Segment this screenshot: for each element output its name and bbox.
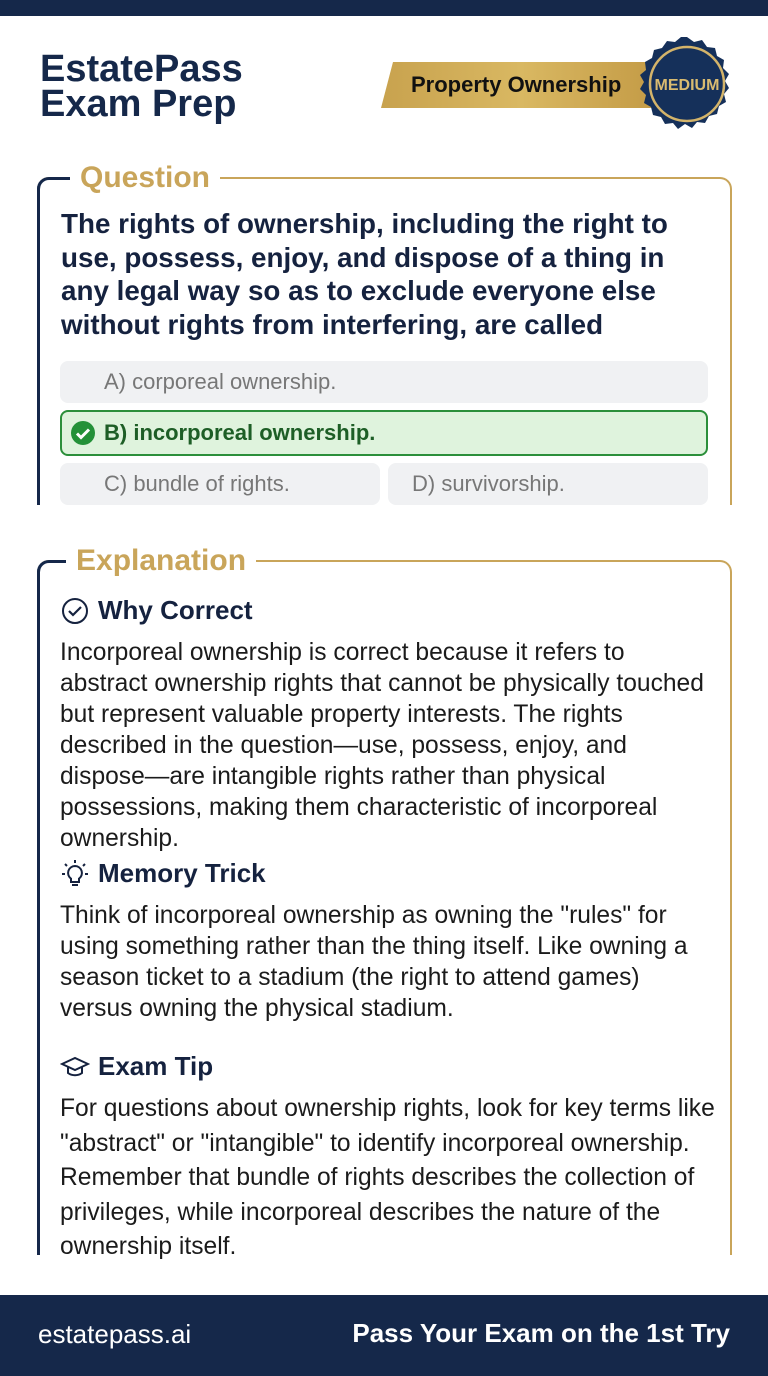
why correct text: [60, 639, 704, 852]
option D: [388, 463, 708, 505]
panel: question: [37, 177, 732, 505]
category ribbon: [381, 62, 661, 108]
logo title: Exam Prep: [40, 83, 236, 125]
option A: A) corporeal ownership.: [104, 369, 336, 394]
memory trick heading: Memory Trick: [98, 858, 266, 888]
why correct text: ownership.: [60, 825, 179, 852]
why correct text: abstract ownership rights that cannot be physically touched: [60, 670, 704, 697]
exam tip text: "abstract" or "intangible" to identify incorporeal ownership.: [60, 1130, 690, 1156]
why correct text: but represent valuable property interests. The rights: [60, 701, 623, 728]
footer tagline: Pass Your Exam on the 1st Try: [352, 1318, 730, 1348]
question text: The rights of ownership, including the right to: [61, 208, 668, 239]
why correct text: dispose—are intangible rights rather than physical: [60, 763, 605, 790]
question text: any legal way so as to exclude everyone else: [61, 275, 656, 306]
exam tip text: For questions about ownership rights, look for key terms like: [60, 1095, 715, 1122]
why correct text: possessions, making them characteristic of incorporeal: [60, 794, 657, 821]
difficulty badge: [640, 37, 729, 129]
exam tip heading: Exam Tip: [98, 1051, 213, 1081]
footer: [0, 1295, 768, 1376]
explanation heading: Explanation: [76, 544, 246, 577]
exam tip text: ownership itself.: [60, 1233, 236, 1260]
icon: check: [71, 421, 95, 445]
why correct text: Incorporeal ownership is correct because it refers to: [60, 639, 625, 666]
memory trick text: [60, 902, 688, 1022]
memory trick text: using something rather than the thing itself. Like owning a: [60, 933, 688, 960]
why correct text: described in the question—use, possess, enjoy, and: [60, 732, 627, 759]
exam tip text: privileges, while incorporeal describes the nature of the: [60, 1198, 660, 1226]
memory trick text: season ticket to a stadium (the right to attend games): [60, 964, 640, 991]
footer url: estatepass.ai: [38, 1319, 191, 1349]
question text: use, possess, enjoy, and dispose of a thing in: [61, 242, 664, 272]
question heading: Question: [80, 161, 210, 194]
top bar: [0, 0, 768, 16]
category ribbon: Property Ownership: [411, 72, 621, 97]
option B correct: [60, 410, 708, 456]
difficulty badge: MEDIUM: [655, 77, 719, 94]
option B correct: B) incorporeal ownership.: [104, 420, 375, 445]
option C: C) bundle of rights.: [104, 471, 290, 496]
why correct heading: Why Correct: [98, 595, 253, 625]
option C: [60, 463, 380, 505]
logo title: [40, 48, 243, 125]
question text: without rights from interfering, are called: [61, 308, 603, 340]
option A: [60, 361, 708, 403]
option D: D) survivorship.: [412, 471, 565, 496]
memory trick text: Think of incorporeal ownership as owning the "rules" for: [60, 902, 667, 929]
memory trick text: versus owning the physical stadium.: [60, 995, 454, 1022]
question text: [60, 208, 668, 340]
panel: explanation: [37, 560, 732, 1255]
exam tip text: [60, 1095, 715, 1260]
exam tip text: Remember that bundle of rights describes the collection of: [60, 1164, 694, 1191]
logo title: EstatePass: [40, 48, 243, 90]
